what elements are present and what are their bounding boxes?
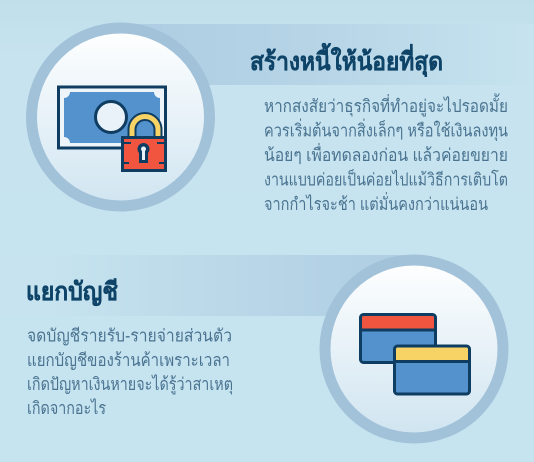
text block: first tip: จากกำไรจะช้า แต่มั่นคงกว่าแน่นอน	[264, 192, 488, 214]
text block: second tip: แยกบัญชีของร้านค้าเพราะเวลา	[27, 350, 230, 370]
text block: second tip: จดบัญชีรายรับ-รายจ่ายส่วนตัว	[27, 326, 232, 346]
header band: second tip	[0, 255, 414, 316]
header band: first tip	[120, 24, 534, 85]
heading: first tip: สร้างหนี้ให้น้อยที่สุด	[250, 42, 443, 78]
icon: banknote with padlock in circle	[26, 22, 215, 212]
text block: first tip	[264, 93, 508, 214]
text block: first tip: น้อยๆ เพื่อทดลองก่อน แล้วค่อยขยาย	[264, 143, 508, 165]
icon: two cards in circle	[320, 254, 508, 444]
heading: second tip: แยกบัญชี	[26, 278, 118, 306]
text block: second tip: เกิดจากอะไร	[27, 398, 106, 418]
text block: second tip: เกิดปัญหาเงินหายจะได้รู้ว่าสาเหตุ	[27, 374, 233, 395]
text block: second tip	[27, 326, 233, 418]
